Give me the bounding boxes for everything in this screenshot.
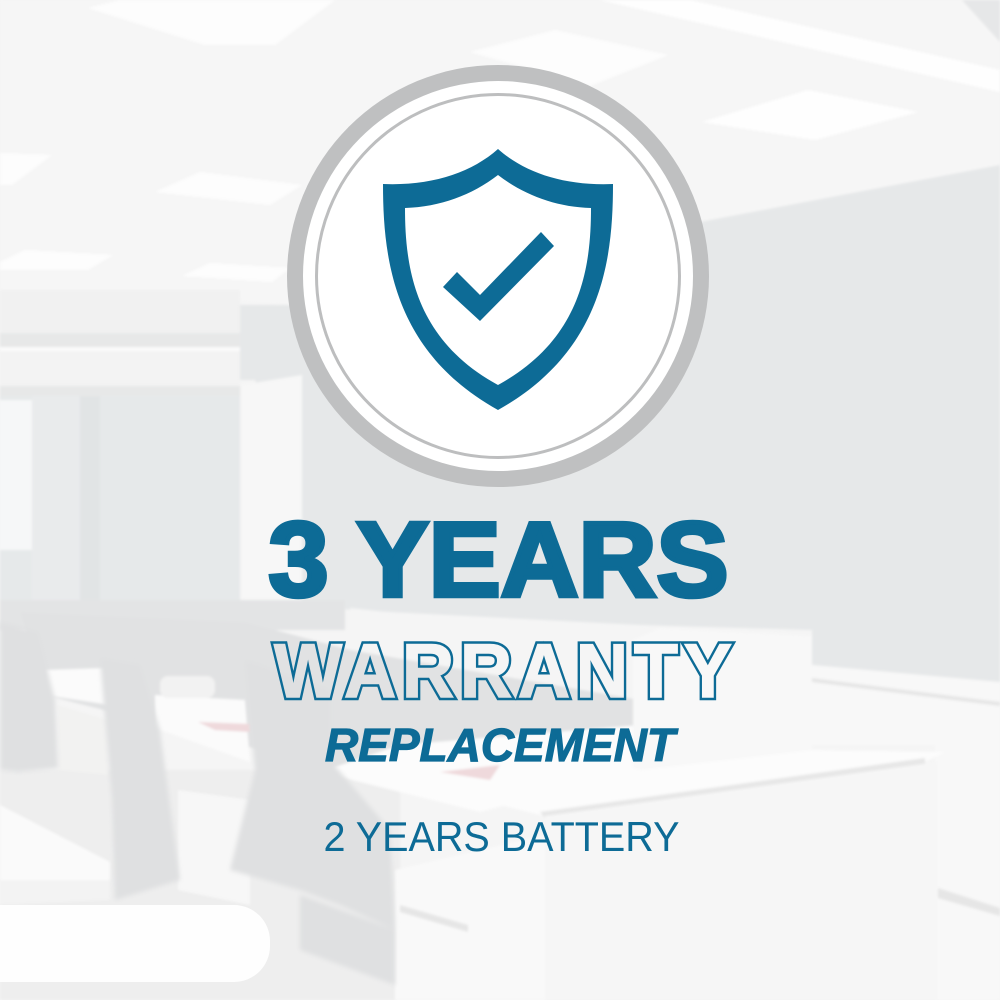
badge: shield in circle [287,65,709,487]
right partition [812,665,1000,1000]
subheading: replacement: REPLACEMENT [325,719,679,771]
dark office band [0,600,345,630]
printer [633,628,812,782]
front desk and cabinets [480,750,945,815]
ceiling and light panels [0,0,1000,305]
icon: shield [383,149,613,410]
icon: check mark [443,232,554,321]
back wall [240,165,1000,684]
text: battery warranty: 2 YEARS BATTERY [324,813,680,860]
white rounded blob bottom-left [0,905,270,982]
desk middle [332,725,640,812]
left beam and window wall [0,290,240,333]
heading: 3 years: 3 YEARS [268,501,728,619]
chairs [0,622,58,772]
desk left [45,668,110,705]
heading: warranty outline: WARRANTY [274,628,732,713]
floor [0,770,400,1000]
